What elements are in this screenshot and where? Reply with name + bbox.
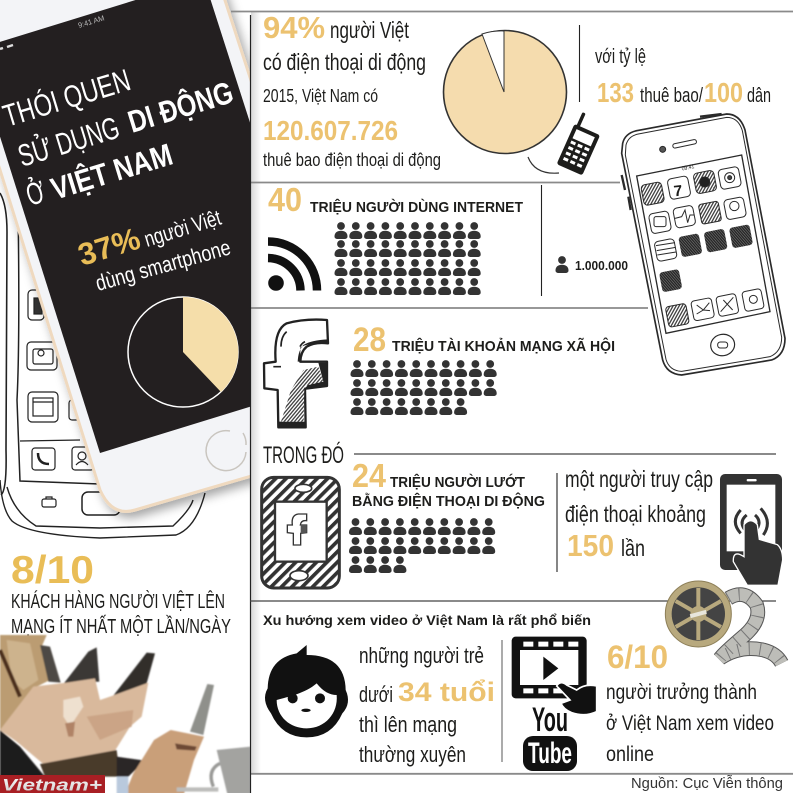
home button [206,431,246,471]
stat: 40 million internet users: 40 [268,181,302,218]
icon: phone with facebook [262,477,339,588]
logo: Vietnam+ [0,775,105,793]
pictogram: 28 people [350,360,497,415]
stat: 94% have mobile phones: thuê bao điện thoại di động [263,150,441,170]
stat: 8/10: 8/10 [11,549,94,592]
stat: 94% have mobile phones: 94% [263,10,325,45]
stat: 150 accesses [565,466,713,563]
stat: 8/10: MẠNG ÍT NHẤT MỘT LẦN/NGÀY [11,615,231,638]
stat: under 34 years old: thì lên mạng [359,712,457,737]
icon: feature phone [557,111,606,175]
icon: wifi [268,242,317,291]
stat: 8/10: KHÁCH HÀNG NGƯỜI VIỆT LÊN [11,590,225,613]
stat: 133 subscribers per 100: 100 [704,77,743,108]
stat: 133 subscribers per 100: 133 [597,77,634,108]
icon: hand-drawn smartphone: 7 [673,183,683,200]
heading: video trend: Xu hướng xem video ở Việt Nam là rất phổ biến [263,612,591,628]
stat: 133 subscribers per 100 [595,46,771,108]
status time: 9:41 AM [77,13,105,30]
stat: 24 million mobile users [352,457,545,510]
icon: hand-drawn phone behind [0,193,205,538]
stat: 94% have mobile phones: 120.607.726 [263,115,398,146]
stat: 24 million mobile users: TRIỆU NGƯỜI LƯỚT [390,473,525,491]
stat: under 34 years old: dưới [359,682,393,707]
stat: 40 million internet users [268,181,523,218]
stat: 150 accesses: điện thoại khoảng [565,501,706,527]
pictogram: 40 people [334,222,481,295]
stat: 28 million social accounts: TRIỆU TÀI KHOẢN MẠNG XÃ HỘI [392,337,615,355]
title: SỬ DỤNG [14,109,124,174]
icon: hand-drawn smartphone: 09:41 [681,164,695,172]
stat: 133 subscribers per 100: thuê bao/ [640,85,703,107]
icon: boy face [265,645,348,737]
title: Ở [22,173,49,213]
pie chart: 94% [444,30,566,154]
stat: 94% have mobile phones [263,10,441,170]
panel: large white phone [0,0,272,511]
icon: hand-drawn smartphone [622,114,785,375]
stat: 6/10 adults watch video: 6/10 [607,639,668,675]
stat: under 34 years old: những người trẻ [359,643,484,668]
pictogram: 24 people [349,518,495,573]
stat: 28 million social accounts: 28 [353,321,386,359]
stat: 94% have mobile phones: có điện thoại di động [263,49,426,75]
stat: 150 accesses: lần [621,535,645,561]
stat: 6/10 adults watch video [606,639,774,766]
stat: 150 accesses: 150 [567,528,614,563]
stat: 37% smartphone: người Việt [141,205,224,252]
stat: 94% have mobile phones: người Việt [330,17,409,43]
stat: 28 million social accounts [353,321,615,359]
title: VIỆT NAM [47,136,177,207]
stat: 8/10 [11,549,231,638]
cord curve [528,157,559,173]
stat: 6/10 adults watch video: người trưởng thành [606,681,757,704]
stat: under 34 years old [359,643,495,767]
icon: video film with hand [512,637,597,715]
stat: 133 subscribers per 100: với tỷ lệ [595,46,646,68]
logo: YouTube: You [532,701,568,739]
signal dots [0,45,13,49]
logo: YouTube: Tube [528,737,572,770]
phone screen [0,0,262,453]
stat: under 34 years old: thường xuyên [359,742,466,767]
stat: 6/10 adults watch video: online [606,743,654,766]
legend: one icon equals 1.000.000: 1.000.000 [575,259,628,273]
stat: 94% have mobile phones: 2015, Việt Nam có [263,86,378,106]
source: Nguồn: Cục Viễn thông [631,775,783,792]
stat: under 34 years old: 34 tuổi [398,677,495,707]
stat: 133 subscribers per 100: dân [747,85,771,107]
stat: 37% smartphone: 37% [74,221,144,273]
heading: trong do: TRONG ĐÓ [263,442,344,469]
title: DI ĐỘNG [124,74,237,140]
divider lines [231,12,793,793]
legend: one icon equals 1.000.000 [556,256,628,273]
stat: 37% smartphone [78,210,230,290]
icon: film reel and strip [665,581,782,663]
stat: 24 million mobile users: BẰNG ĐIỆN THOẠI DI ĐỘNG [352,492,545,510]
icon: touch phone [720,474,783,585]
logo: YouTube [523,701,577,771]
icon: hand-drawn facebook f [264,320,328,427]
illustration: hands holding phones [0,635,251,793]
stat: 24 million mobile users: 24 [352,457,387,494]
stat: 37% smartphone: dùng smartphone [93,235,233,296]
phone body [0,0,272,511]
stat: 150 accesses: một người truy cập [565,466,713,492]
title [1,69,233,204]
pie chart: 37% [128,297,238,407]
stat: 40 million internet users: TRIỆU NGƯỜI DÙNG INTERNET [310,198,523,216]
title: THÓI QUEN [0,62,134,134]
